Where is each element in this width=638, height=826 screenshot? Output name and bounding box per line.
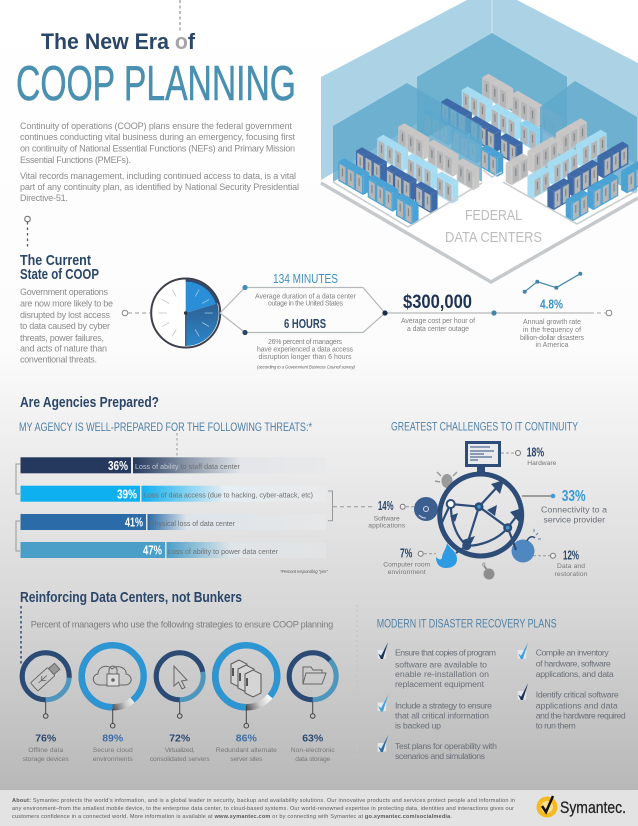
- stat: 7% computer room: [383, 546, 431, 576]
- icon: flame: [436, 543, 457, 568]
- stat: 14% software: [368, 498, 406, 530]
- checklist item: inventory: [518, 642, 614, 679]
- current state text: are now more likely to be: [20, 299, 113, 309]
- chart: growth line: [523, 272, 582, 294]
- stat: 18% hardware: Hardware: [527, 460, 557, 467]
- intro text: on continuity of National Essential Functions (NEFs) and Primary Mission: [20, 144, 295, 154]
- checklist item: backup: [378, 694, 492, 730]
- checklist item: identify: and the hardware required: [536, 710, 626, 720]
- panel: strategy 76%: 76%: [35, 733, 57, 745]
- about text: any environment–from the smallest mobile device, to the enterprise data center, to cloud-based systems. Our world-renowned expertise in protecting data, identities and interactions gives our: [12, 806, 514, 812]
- current state text: conventional threats.: [20, 355, 97, 365]
- stat: 4.8%: in the frequency of: [523, 327, 581, 334]
- intro text: Continuity of operations (COOP) plans ensure the federal government: [20, 121, 292, 131]
- intro text: [20, 121, 299, 203]
- current state text: to data caused by cyber: [20, 321, 110, 331]
- checklist item: identify: Identify critical software: [536, 689, 619, 699]
- panel: strategy 86%: [215, 645, 277, 763]
- bar chart: threats: 41%: [125, 516, 143, 530]
- checklist item: identify: [518, 683, 626, 730]
- stat: 6 hours: 6 HOURS: [284, 317, 326, 331]
- heading: the current state: State of COOP: [20, 266, 99, 283]
- stat: 33% connectivity: [541, 488, 607, 525]
- dotted connector to current state: [25, 216, 30, 248]
- checklist item: copies: [378, 642, 496, 689]
- checklist item: copies: replacement equipment: [395, 679, 485, 689]
- icon: bug: [435, 472, 459, 488]
- stat: 18% hardware: 18%: [527, 445, 544, 460]
- stat: $300,000: [401, 292, 475, 333]
- icon: clock: [122, 278, 220, 348]
- panel: strategy 72%: Virtualized,: [165, 747, 195, 754]
- panel: strategy 76%: Offline data: [28, 747, 63, 754]
- timeline connector: [220, 285, 612, 335]
- intro text: Directive-51.: [20, 193, 68, 203]
- intro text: Vital records management, including continued access to data, is a vital: [20, 171, 296, 181]
- checklist item: copies: software are available to: [395, 659, 487, 669]
- diagram: globe network: [333, 441, 555, 580]
- stat: 7% computer room: environment: [388, 569, 426, 576]
- stat: 12% data: [550, 547, 588, 578]
- bar chart: threats: Loss of ability to staff data center: [135, 464, 241, 471]
- bar chart: threats: Physical loss of data center: [150, 521, 236, 528]
- stat: 6 hours: disruption longer than 6 hours: [258, 354, 352, 361]
- stat: 14% software: 14%: [378, 498, 394, 513]
- panel: strategy 86%: 86%: [236, 733, 257, 745]
- title: [16, 0, 296, 111]
- panel: strategy 72%: 72%: [169, 733, 191, 745]
- icon: disc: [414, 497, 438, 521]
- stat: 33% connectivity: 33%: [562, 488, 586, 505]
- panel: strategy 86%: Redundant alternate: [216, 747, 277, 754]
- panel: strategy 72%: [150, 653, 210, 763]
- current state text: [20, 287, 113, 365]
- bar chart: threats: [16, 433, 332, 574]
- panel: strategy 76%: [22, 653, 69, 763]
- icon: usb drive: [30, 662, 61, 691]
- bar chart: threats: 39%: [117, 487, 137, 501]
- panel: strategy 89%: 89%: [102, 733, 124, 745]
- footer band: [0, 790, 638, 826]
- stat: 12% data: 12%: [563, 547, 579, 562]
- illustration: federal data centers: [321, 0, 638, 282]
- title: COOP PLANNING: [16, 57, 296, 111]
- stat: 6 hours: [257, 317, 356, 370]
- panel: strategy 63%: 63%: [302, 733, 324, 745]
- intro text: continues conducting vital business during an emergency, focusing first: [20, 132, 295, 142]
- subheading: challenges: GREATEST CHALLENGES TO IT CONTINUITY: [391, 422, 578, 434]
- logo: Symantec: [536, 796, 626, 818]
- current state text: threats, power failures,: [20, 333, 104, 343]
- dotted connector: [20, 606, 22, 666]
- stat: $300,000: $300,000: [403, 292, 472, 313]
- stat: 7% computer room: 7%: [400, 546, 413, 561]
- subheading: threats: MY AGENCY IS WELL-PREPARED FOR THE FOLLOWING THREATS:*: [19, 422, 312, 434]
- intro text: Essential Functions (PMEFs).: [20, 155, 131, 165]
- dotted divider: [356, 605, 358, 760]
- panel: strategy 89%: [82, 645, 144, 763]
- icon: cursor: [174, 666, 187, 689]
- panel: strategy 76%: storage devices: [23, 756, 69, 763]
- stat: 4.8%: in America: [536, 342, 569, 349]
- panel: strategy 89%: environments: [93, 756, 133, 763]
- logo: Symantec: Symantec.: [560, 799, 626, 817]
- bar chart: threats: *Percent responding "yes": [280, 569, 328, 574]
- subheading: modern IT plans: MODERN IT DISASTER RECOVERY PLANS: [377, 619, 557, 631]
- stat: 4.8%: Annual growth rate: [523, 319, 581, 326]
- current state text: Government operations: [20, 287, 108, 297]
- checklist item: test plans: [378, 735, 497, 761]
- icon: server stacks: [231, 660, 261, 697]
- checklist item: test plans: scenarios and simulations: [395, 751, 486, 761]
- checklist item: copies: Ensure that copies of program: [395, 648, 496, 658]
- icon: cloud lock: [93, 666, 131, 686]
- stat: 12% data: Data and: [557, 563, 585, 570]
- stat: 134 minutes: Average duration of a data center: [255, 294, 357, 300]
- stat: 14% software: Software: [374, 516, 400, 523]
- stat: 33% connectivity: Connectivity to a: [541, 505, 607, 515]
- about text: customers confidence in a connected world. More information is available at www.symantec.com or by connecting with Symantec at go.symantec.com/socialmedia.: [12, 814, 452, 820]
- panel: strategy 63%: Non-electronic: [291, 747, 335, 754]
- stat: 4.8%: [520, 297, 585, 349]
- checklist item: identify: applications and data: [536, 700, 618, 710]
- illustration: federal data centers: DATA CENTERS: [445, 229, 542, 246]
- heading: the current state: [20, 252, 99, 283]
- stat: 7% computer room: Computer room: [383, 562, 431, 569]
- bar chart: threats: 47%: [143, 544, 162, 558]
- icon: folder: [303, 667, 326, 684]
- stat: 14% software: applications: [368, 522, 406, 530]
- heading: the current state: The Current: [20, 252, 91, 269]
- stat: 4.8%: billion-dollar disasters: [520, 335, 585, 342]
- stat: $300,000: Average cost per hour of: [401, 318, 475, 325]
- panel: strategy 89%: Secure cloud: [93, 747, 133, 754]
- bar chart: threats: Loss of ability to power data center: [168, 549, 279, 556]
- panel: strategy 72%: consolidated servers: [150, 756, 210, 763]
- checklist item: backup: Include a strategy to ensure: [395, 700, 492, 710]
- stat: 4.8%: 4.8%: [540, 297, 563, 312]
- icon: bomb: [512, 529, 541, 562]
- checklist item: inventory: of hardware, software: [536, 659, 611, 669]
- about text: [12, 798, 515, 820]
- bar chart: threats: 36%: [108, 459, 128, 473]
- icon: monitor: [465, 441, 501, 472]
- stat: 18% hardware: [516, 445, 557, 467]
- panel: strategy 63%: [289, 653, 336, 763]
- strategies intro: Percent of managers who use the following strategies to ensure COOP planning: [31, 620, 333, 630]
- current state text: disrupted by lost access: [20, 310, 110, 320]
- checklist item: identify: to run them: [536, 720, 576, 730]
- stat: 12% data: restoration: [554, 571, 588, 578]
- illustration: federal data centers: FEDERAL: [465, 207, 522, 224]
- checklist item: test plans: Test plans for operability with: [395, 741, 497, 751]
- panel: strategy 86%: server sites: [230, 756, 263, 763]
- stat: 134 minutes: [255, 272, 357, 308]
- stat: 6 hours: (according to a Government Business Council survey): [257, 364, 356, 370]
- icon: plug: [483, 563, 494, 580]
- checklist item: backup: is backed up: [395, 720, 441, 730]
- intro text: part of any continuity plan, as identified by National Security Presidential: [20, 182, 299, 192]
- checklist item: copies: enable re-installation on: [395, 669, 489, 679]
- about text: About: Symantec protects the world's information, and is a global leader in security, backup and availability solutions. Our innovative products and services protect people and information in: [12, 798, 515, 804]
- heading: reinforcing: Reinforcing Data Centers, not Bunkers: [20, 589, 242, 606]
- panel: strategy 63%: data storage: [295, 756, 330, 763]
- stat: $300,000: a data center outage: [407, 326, 469, 333]
- checklist item: backup: that all critical information: [395, 710, 489, 720]
- current state text: and acts of nature than: [20, 344, 107, 354]
- bar chart: threats: Loss of data access (due to hacking, cyber-attack, etc): [144, 492, 313, 500]
- stat: 134 minutes: 134 MINUTES: [273, 272, 338, 286]
- title: The New Era of: [41, 29, 196, 54]
- checklist item: inventory: applications, and data: [536, 669, 614, 679]
- stat: 6 hours: have experienced a data access: [257, 346, 354, 354]
- stat: 134 minutes: outage in the United States: [268, 300, 344, 308]
- stat: 6 hours: 26% percent of managers: [268, 339, 343, 346]
- checklist item: inventory: Compile an inventory: [536, 648, 609, 658]
- stat: 33% connectivity: service provider: [544, 515, 605, 525]
- heading: are agencies prepared: Are Agencies Prepared?: [20, 394, 159, 411]
